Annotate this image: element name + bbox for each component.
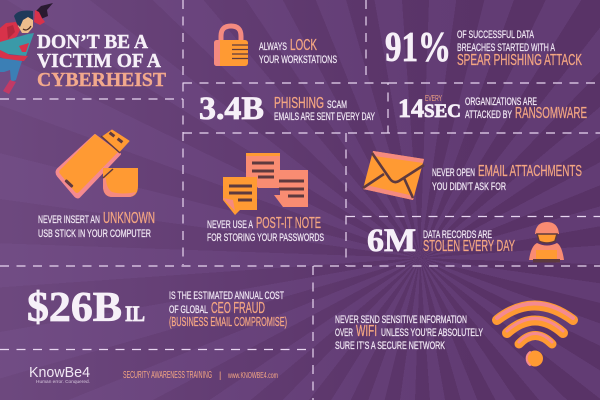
panel: wifi warning: WIFI bbox=[356, 323, 377, 340]
title bbox=[37, 31, 167, 91]
panel: post-it notes: NEVER USE A bbox=[207, 219, 253, 231]
panel: 6M records stat: 6M bbox=[367, 223, 416, 259]
footer: training and website: SECURITY AWARENESS TRAINING bbox=[123, 370, 212, 381]
panel: email attachments: NEVER OPEN bbox=[432, 167, 475, 179]
title: VICTIM OF A bbox=[37, 50, 162, 72]
panel: CEO fraud stat: OF GLOBAL bbox=[169, 304, 208, 316]
panel: 3.4B phishing stat: EMAILS ARE SENT EVERY DAY bbox=[274, 111, 375, 123]
panel: USB stick: USB STICK IN YOUR COMPUTER bbox=[38, 228, 151, 240]
panel: 14 seconds ransomware stat: 14 bbox=[398, 94, 424, 123]
panel: 91 percent stat bbox=[385, 25, 582, 71]
panel: 6M records stat: STOLEN EVERY DAY bbox=[423, 238, 515, 255]
title: DON’T BE A bbox=[37, 31, 149, 53]
panel: 14 seconds ransomware stat: ORGANIZATIONS ARE bbox=[465, 96, 537, 108]
icon: hacker at laptop bbox=[529, 222, 564, 262]
panel: wifi warning bbox=[335, 304, 573, 366]
panel: post-it notes bbox=[207, 153, 324, 244]
panel: lock workstations: YOUR WORKSTATIONS bbox=[259, 54, 337, 66]
panel: CEO fraud stat: $26B bbox=[27, 285, 122, 331]
panel: CEO fraud stat: (BUSINESS EMAIL COMPROMISE) bbox=[169, 315, 287, 329]
panel: lock workstations: LOCK bbox=[290, 37, 317, 54]
title: CYBERHEIST bbox=[37, 69, 167, 91]
footer: training and website: | bbox=[219, 370, 221, 380]
panel: 6M records stat: DATA RECORDS ARE bbox=[423, 229, 492, 241]
panel: wifi warning: OVER bbox=[335, 327, 353, 339]
panel: 3.4B phishing stat bbox=[199, 91, 375, 127]
logo: KnowBe4: Human error. Conquered. bbox=[36, 379, 90, 384]
panel: CEO fraud stat: CEO FRAUD bbox=[211, 300, 265, 317]
panel: 6M records stat bbox=[367, 222, 564, 262]
panel: CEO fraud stat: IL bbox=[125, 301, 145, 326]
panel: lock workstations bbox=[214, 26, 337, 66]
panel: email attachments bbox=[363, 151, 582, 200]
icon: superhero bbox=[0, 3, 53, 94]
panel: 91 percent stat: OF SUCCESSFUL DATA bbox=[457, 29, 534, 41]
panel: lock workstations: ALWAYS bbox=[259, 41, 287, 53]
panel: wifi warning: SURE IT’S A SECURE NETWORK bbox=[335, 340, 445, 352]
panel: CEO fraud stat bbox=[27, 285, 287, 331]
logo: KnowBe4: KnowBe4 bbox=[29, 364, 90, 381]
icon: padlock bbox=[214, 26, 248, 66]
panel: 91 percent stat: 91% bbox=[385, 25, 451, 71]
panel: 14 seconds ransomware stat: SEC bbox=[424, 101, 461, 122]
panel: post-it notes: POST-IT NOTE bbox=[256, 215, 321, 232]
icon: envelope bbox=[363, 151, 424, 200]
footer: training and website: www.KNOWBE4.com bbox=[227, 371, 278, 380]
panel: 14 seconds ransomware stat: EVERY bbox=[425, 94, 442, 103]
panel: 3.4B phishing stat: 3.4B bbox=[199, 91, 264, 127]
panel: 14 seconds ransomware stat: ATTACKED BY bbox=[465, 109, 512, 121]
panel: CEO fraud stat: IS THE ESTIMATED ANNUAL COST bbox=[169, 290, 284, 302]
icon: wifi bbox=[497, 304, 573, 366]
panel: wifi warning: NEVER SEND SENSITIVE INFORMATION bbox=[335, 314, 467, 326]
panel: 3.4B phishing stat: SCAM bbox=[327, 99, 347, 111]
panel: email attachments: YOU DIDN’T ASK FOR bbox=[432, 181, 506, 193]
panel: 3.4B phishing stat: PHISHING bbox=[274, 95, 324, 112]
panel: wifi warning: UNLESS YOU’RE ABSOLUTELY bbox=[381, 327, 483, 339]
panel: 14 seconds ransomware stat bbox=[398, 94, 587, 123]
panel: USB stick: UNKNOWN bbox=[103, 210, 155, 227]
panel: post-it notes: FOR STORING YOUR PASSWORDS bbox=[207, 232, 324, 244]
panel: USB stick bbox=[38, 130, 155, 240]
icon: USB drive bbox=[56, 130, 138, 198]
icon: sticky notes bbox=[223, 153, 308, 215]
panel: USB stick: NEVER INSERT AN bbox=[38, 214, 100, 226]
